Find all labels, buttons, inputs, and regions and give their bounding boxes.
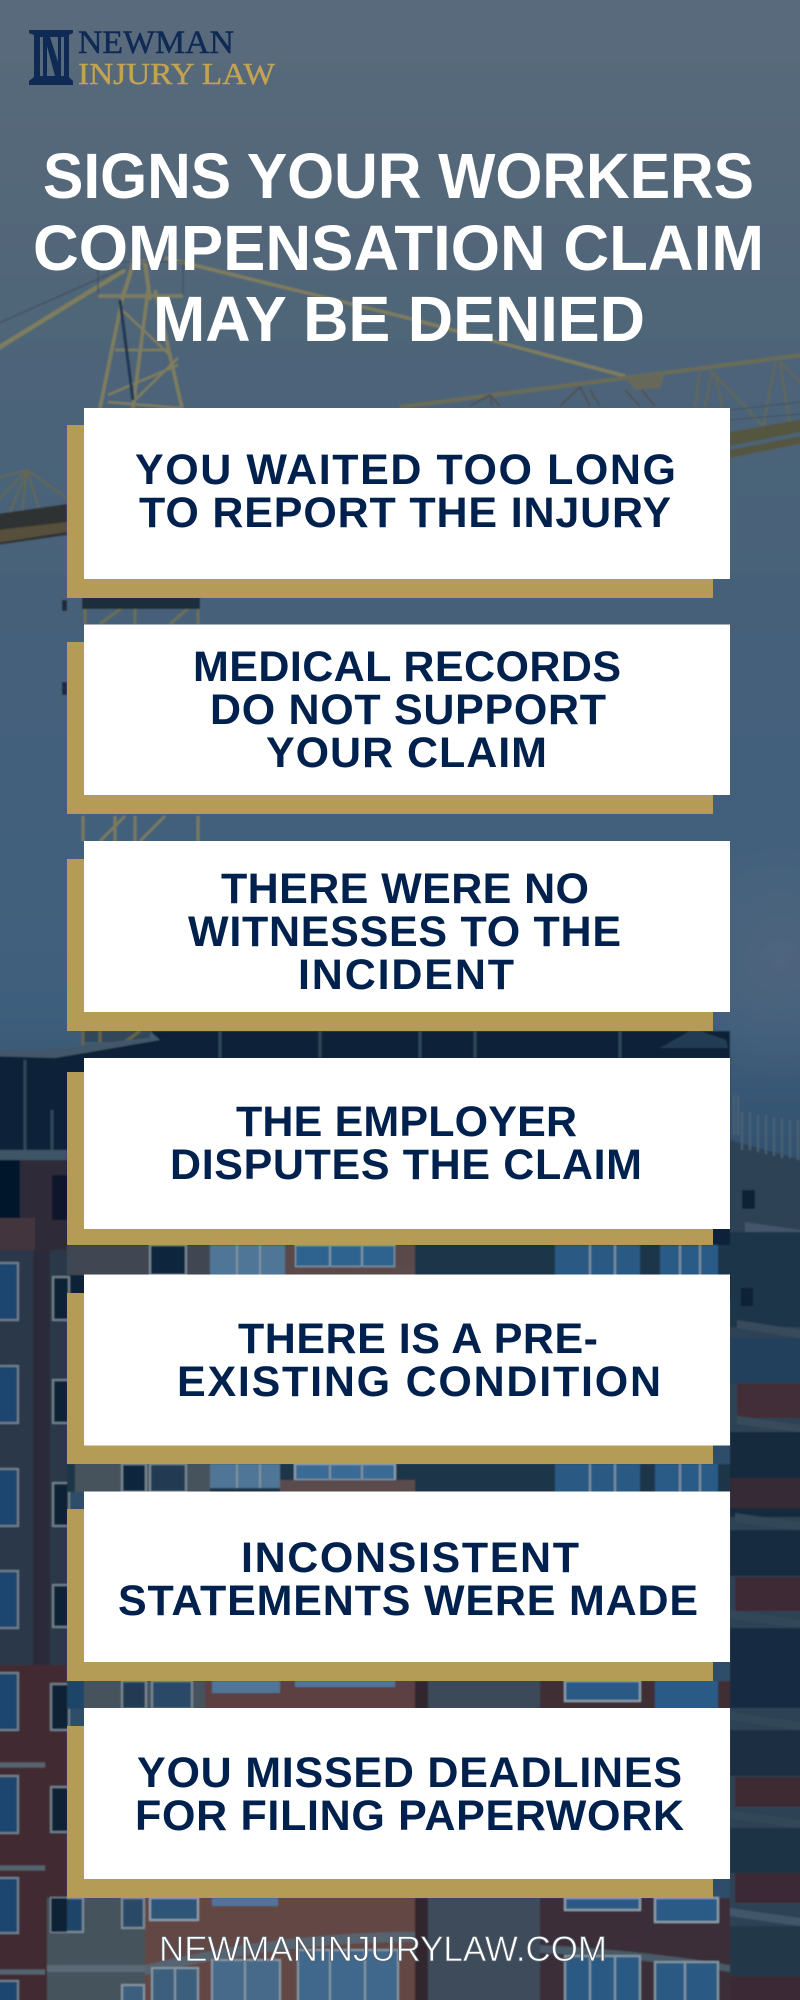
title xyxy=(33,140,764,355)
panel: medical records xyxy=(67,624,730,814)
panel: no witnesses xyxy=(67,841,730,1031)
panel text: INCONSISTENT xyxy=(241,1534,579,1582)
facade below the last card xyxy=(47,1898,730,2000)
panel text: MEDICAL RECORDS xyxy=(193,643,621,691)
panel text: TO REPORT THE INJURY xyxy=(139,489,671,537)
panel: missed deadlines xyxy=(67,1708,730,1898)
title: MAY BE DENIED xyxy=(153,283,645,355)
panel text: STATEMENTS WERE MADE xyxy=(118,1577,698,1625)
building right block xyxy=(730,1095,800,2000)
panel text xyxy=(177,1315,661,1406)
panel text xyxy=(118,1534,698,1625)
panel text: THE EMPLOYER xyxy=(236,1098,577,1146)
title: COMPENSATION CLAIM xyxy=(33,212,764,284)
panel text: INCIDENT xyxy=(298,951,514,999)
panel text: FOR FILING PAPERWORK xyxy=(135,1792,684,1840)
panel text: DO NOT SUPPORT xyxy=(210,686,606,734)
footer website: NEWMANINJURYLAW.COM xyxy=(159,1930,607,1969)
panel text xyxy=(135,1749,684,1840)
icon: pillar monogram xyxy=(29,30,73,85)
facade strip between cards 5 and 6 xyxy=(67,1464,730,1492)
logo text: Injury Law: INJURY LAW xyxy=(78,56,276,91)
panel text: YOU WAITED TOO LONG xyxy=(135,446,676,494)
logo: Newman Injury Law xyxy=(29,25,276,91)
panel text xyxy=(135,446,676,537)
logo text: Newman: NEWMAN xyxy=(78,25,234,61)
building upper floor xyxy=(0,1031,730,1300)
panel text: DISPUTES THE CLAIM xyxy=(170,1141,642,1189)
panel: you waited too long xyxy=(67,408,730,598)
facade strip between cards 4 and 5 xyxy=(67,1245,730,1275)
panel text xyxy=(188,865,621,999)
facade strip between cards 6 and 7 xyxy=(67,1681,730,1709)
title: SIGNS YOUR WORKERS xyxy=(43,140,754,212)
panel text xyxy=(170,1098,642,1189)
panel text: YOUR CLAIM xyxy=(266,729,547,777)
panel: inconsistent statements xyxy=(67,1492,730,1681)
panel text: YOU MISSED DEADLINES xyxy=(137,1749,682,1797)
panel: pre-existing condition xyxy=(67,1274,730,1464)
panel text: THERE WERE NO xyxy=(221,865,589,913)
panel text: THERE IS A PRE- xyxy=(238,1315,598,1363)
panel text xyxy=(193,643,621,777)
panel text: EXISTING CONDITION xyxy=(177,1358,661,1406)
panel: employer disputes xyxy=(67,1058,730,1245)
panel text: WITNESSES TO THE xyxy=(188,908,621,956)
tower crane xyxy=(0,258,800,841)
building left edge xyxy=(0,1150,69,2000)
